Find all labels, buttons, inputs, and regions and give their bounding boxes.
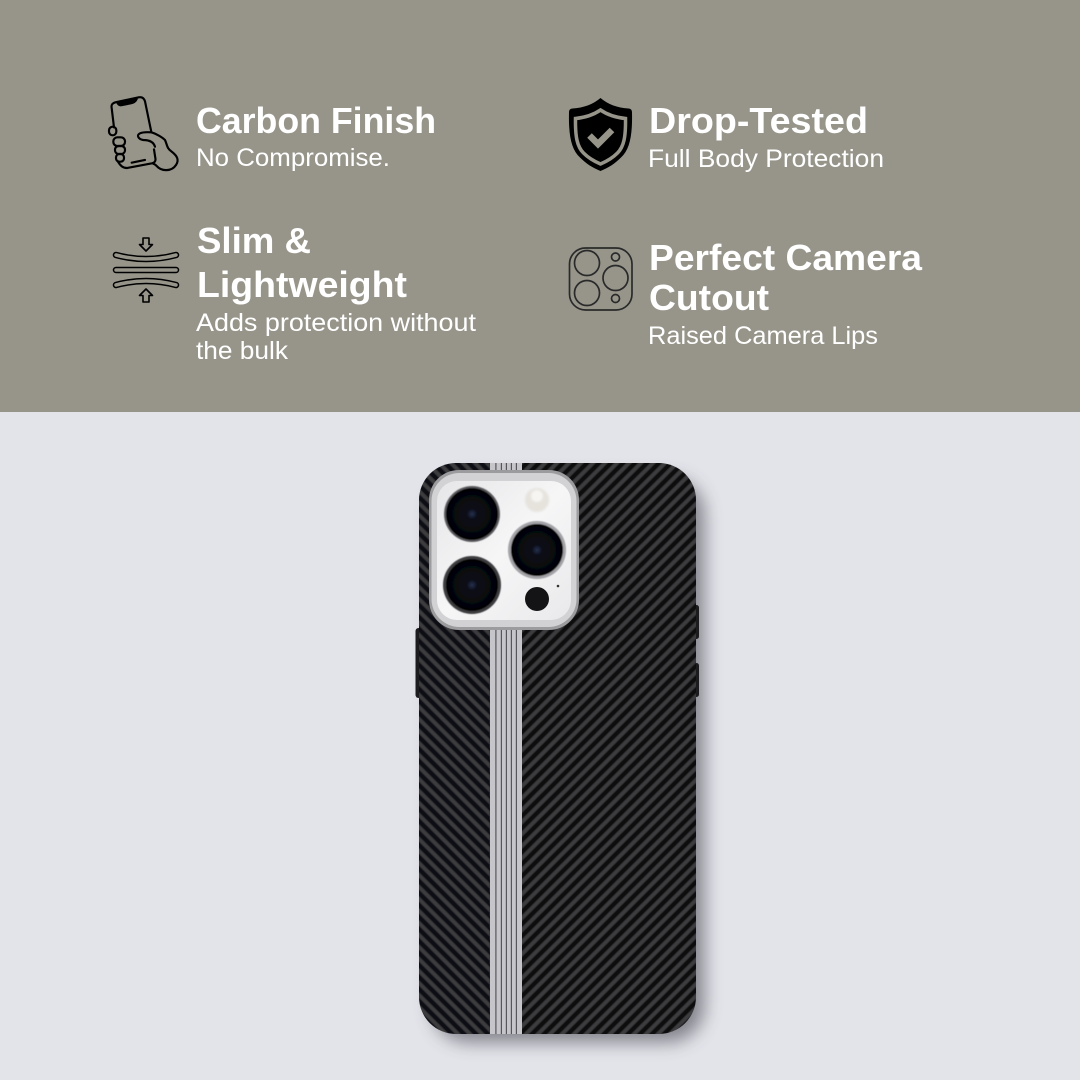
feature: carbon finish xyxy=(109,97,436,172)
icon: shield with check xyxy=(569,98,632,171)
flash xyxy=(525,488,549,512)
heading: Perfect Camera Cutout: Cutout xyxy=(649,277,769,318)
background: top panel xyxy=(0,0,1080,412)
heading: Slim & Lightweight: Lightweight xyxy=(197,264,407,305)
text: adds protection xyxy=(196,309,476,365)
background: bottom panel xyxy=(0,412,1080,1080)
lidar sensor xyxy=(525,587,549,611)
text: Raised Camera Lips: Raised Camera Lips xyxy=(648,322,878,350)
case body with carbon weave xyxy=(410,455,705,1045)
side buttons xyxy=(416,605,699,698)
text: adds protection: Adds protection without xyxy=(196,309,476,337)
text: No Compromise: No Compromise. xyxy=(196,144,390,172)
feature: perfect camera cutout xyxy=(570,237,923,350)
heading: Drop-Tested: Drop-Tested xyxy=(649,100,868,141)
phone case product image xyxy=(410,455,705,1045)
text: adds protection: the bulk xyxy=(196,337,289,365)
text: Full Body Protection: Full Body Protection xyxy=(648,145,884,173)
heading: Carbon Finish: Carbon Finish xyxy=(196,100,436,141)
camera island xyxy=(429,470,579,630)
lens: top left xyxy=(444,486,500,542)
heading: Slim & Lightweight: Slim & xyxy=(197,220,311,261)
silver centre stripe xyxy=(490,463,522,1034)
heading: Perfect Camera Cutout xyxy=(649,237,923,318)
feature: drop-tested xyxy=(569,98,884,173)
feature: slim and lightweight xyxy=(116,220,476,365)
icon: camera module xyxy=(570,248,632,310)
heading: Slim & Lightweight xyxy=(197,220,407,305)
lens: right xyxy=(508,521,566,579)
lens: bottom left xyxy=(443,556,501,614)
microphone dot xyxy=(557,585,559,587)
case shadow xyxy=(432,478,704,1042)
icon: compressed layers xyxy=(116,238,176,302)
heading: Perfect Camera Cutout: Perfect Camera xyxy=(649,237,923,278)
icon: hand holding phone xyxy=(109,97,178,170)
